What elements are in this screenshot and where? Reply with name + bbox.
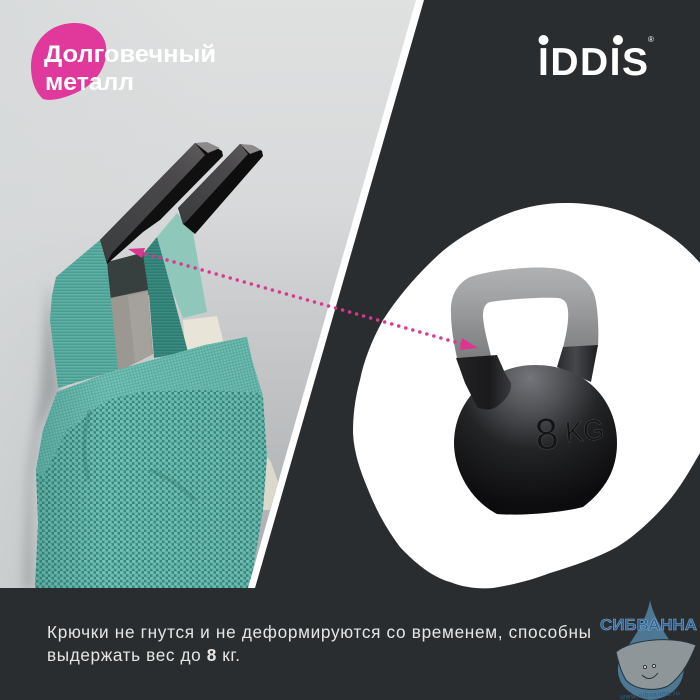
arrowhead at kettlebell xyxy=(460,338,478,350)
kettlebell body xyxy=(454,365,617,515)
description text xyxy=(47,622,591,665)
hook one xyxy=(100,142,223,264)
front strap xyxy=(143,237,188,358)
weight label: KG xyxy=(564,414,606,449)
heading xyxy=(44,41,216,96)
metal plate reflection xyxy=(107,252,153,372)
brand name: СИБВАННА xyxy=(600,617,697,634)
white blob xyxy=(353,203,700,588)
registered mark: ® xyxy=(648,35,654,44)
towel body xyxy=(35,337,267,588)
back strap xyxy=(157,213,207,318)
wall xyxy=(0,0,430,588)
left sleeve xyxy=(456,355,511,410)
kettlebell xyxy=(451,267,617,515)
right sleeve xyxy=(557,345,598,382)
heading: Долговечный xyxy=(44,41,216,68)
weight label: 8 xyxy=(533,409,560,460)
hook two xyxy=(178,144,263,234)
pink badge blob xyxy=(31,23,106,100)
left strap xyxy=(50,240,118,388)
heading: металл xyxy=(45,69,134,96)
watermark: Sibvanna logo xyxy=(600,600,697,700)
brand logo: IDDIS xyxy=(538,41,648,84)
arrowhead at hook xyxy=(128,248,145,258)
water drop xyxy=(618,600,684,700)
face xyxy=(642,664,658,679)
white towel behind xyxy=(183,316,278,510)
description text: Крючки не гнутся и не деформируются со временем, способны xyxy=(47,622,591,642)
white diagonal divider xyxy=(248,0,424,588)
photo: towel on double hook xyxy=(0,0,430,588)
kettlebell handle xyxy=(451,267,598,358)
dotted arrow connecting hook and kettlebell xyxy=(128,248,478,350)
bathtub xyxy=(616,640,696,689)
description text: выдержать вес до 8 кг. xyxy=(47,645,240,665)
weight label xyxy=(533,405,606,460)
